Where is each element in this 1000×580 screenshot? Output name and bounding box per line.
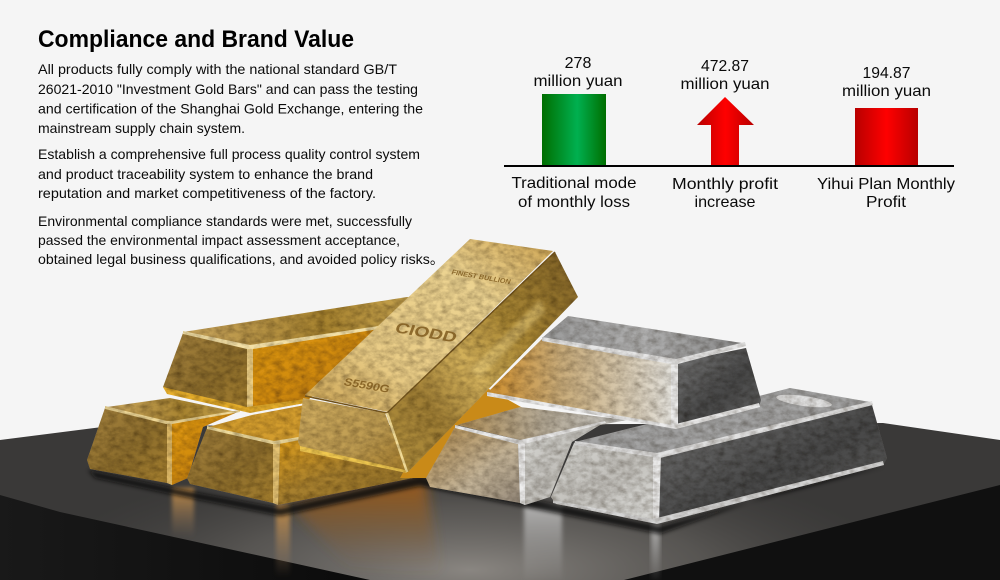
value label: 472.87: 472.87 [701, 58, 749, 75]
gold bar: small left [87, 398, 240, 485]
chart: monthly profit comparison [504, 55, 955, 211]
axis label: Yihui plan: Yihui Plan Monthly [817, 176, 955, 193]
paragraph: environmental compliance: Environmental compliance standards were met, successfully [38, 213, 412, 229]
paragraph: environmental compliance [38, 213, 444, 267]
axis label: traditional mode: of monthly loss [518, 194, 630, 211]
table reflections [88, 466, 885, 580]
value label: 194.87: 194.87 [862, 65, 911, 82]
value label: 194.87 [842, 65, 931, 100]
axis label: Yihui plan: Profit [866, 194, 907, 211]
axis label: Yihui plan [817, 176, 955, 211]
axis label: traditional mode: Traditional mode [512, 175, 637, 192]
silver bar: middle [426, 407, 627, 505]
paragraph: national standard: mainstream supply chain system. [38, 120, 245, 136]
gold fill between big bar and silver bars [400, 388, 530, 478]
gold bar: big leaning [298, 239, 578, 473]
bar stamp markings [342, 269, 512, 396]
paragraph: environmental compliance: passed the environmental impact assessment acceptance, [38, 232, 400, 248]
silver bar: large front [551, 388, 887, 524]
paragraph: quality control: Establish a comprehensive full process quality control system [38, 146, 420, 162]
value label: 472.87 [680, 58, 770, 93]
axis label: monthly profit increase: Monthly profit [672, 176, 779, 193]
paragraph: national standard [38, 61, 423, 136]
bar stamp markings: FINEST BULLION [450, 269, 512, 286]
table [0, 423, 1000, 580]
bar stamp markings: S5590G [342, 377, 391, 396]
axis label: traditional mode [512, 175, 637, 211]
bar stamp markings: CIODD [393, 320, 460, 346]
arrow: monthly profit increase [697, 97, 754, 166]
axis label: monthly profit increase: increase [694, 194, 756, 211]
paragraph: national standard: All products fully comply with the national standard GB/T [38, 61, 397, 77]
text block: compliance paragraphs [38, 61, 444, 267]
paragraph: quality control [38, 146, 420, 201]
chart baseline [504, 165, 954, 167]
value label: 278: million yuan [534, 73, 622, 90]
paragraph: environmental compliance: obtained legal business qualifications, and avoided policy risks。 [38, 251, 444, 267]
paragraph: quality control: reputation and market competitiveness of the factory. [38, 185, 376, 201]
illustration: gold and silver bars on a dark table [0, 239, 1000, 580]
silver bar: back [487, 316, 761, 429]
paragraph: national standard: and certification of the Shanghai Gold Exchange, entering the [38, 100, 423, 116]
value label: 472.87: million yuan [680, 76, 770, 93]
value label: 278 [534, 55, 622, 90]
value label: 194.87: million yuan [842, 83, 931, 100]
title: Compliance and Brand Value [38, 26, 354, 53]
bar: Yihui plan profit [855, 108, 918, 166]
axis label: monthly profit increase [672, 176, 779, 211]
value label: 278: 278 [565, 55, 591, 72]
gold bar: back [163, 297, 420, 413]
gold bar: middle [187, 405, 430, 505]
paragraph: quality control: and product traceability system to enhance the brand [38, 166, 373, 182]
paragraph: national standard: 26021-2010 "Investment Gold Bars" and can pass the testing [38, 81, 418, 97]
bar: traditional mode loss [542, 94, 606, 166]
